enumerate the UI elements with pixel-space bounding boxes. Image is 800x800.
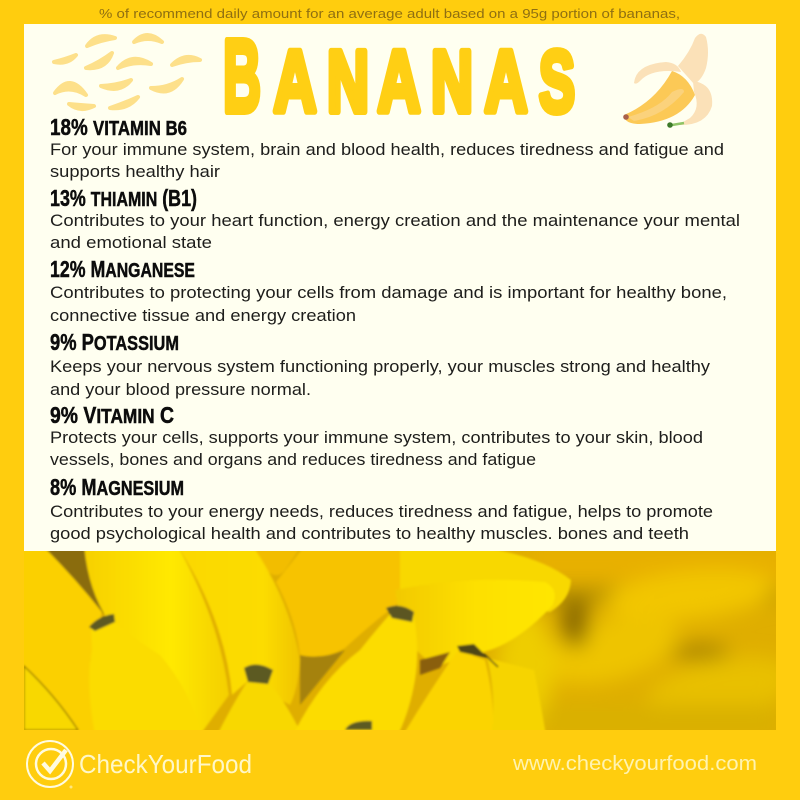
item: vitamin C [50,402,703,469]
item: thiamin [50,185,740,252]
title: N [431,34,473,130]
logo wordmark: CheckYourFood [79,749,252,779]
photo: left bananas [20,545,102,735]
title: A [378,34,420,130]
panel: nutrients [24,18,776,551]
item: vitamin C: vessels, bones and organs and reduces tiredness and fatigue [50,450,536,469]
photo: sharp foreground bananas [20,545,571,735]
item: potassium: 9% POTASSIUM [50,329,179,355]
item: manganese: 12% MANGANESE [50,256,195,282]
website url: www.checkyourfood.com [512,753,757,775]
icon: peeled banana [623,34,712,128]
icon: scattered banana shapes [54,35,200,109]
photo: back banana upper middle [256,551,298,575]
photo: front banana left [89,623,182,730]
subtitle: portion note: % of recommend daily amount for an average adult based on a 95g portion of bananas, [99,6,680,21]
photo: banana with stem, centre [218,680,298,730]
item: potassium: Keeps your nervous system functioning properly, your muscles strong and healthy [50,357,711,376]
title: S [539,34,575,130]
photo background: blurred bananas [492,555,776,722]
title: A [274,34,316,130]
item: vitamin B6: supports healthy hair [50,162,220,181]
item: vitamin B6 [50,114,724,181]
item: vitamin B6: 18% VITAMIN B6 [50,114,187,140]
item: magnesium: 8% MAGNESIUM [50,474,184,500]
item: vitamin C: 9% VITAMIN C [50,402,174,428]
item: thiamin: Contributes to your heart function, energy creation and the maintenance your mental [50,211,740,230]
icon: check mark badge [27,741,73,788]
item: vitamin B6: For your immune system, brain and blood health, reduces tiredness and fatigue and [50,140,724,159]
item: magnesium: Contributes to your energy needs, reduces tiredness and fatigue, helps to promote [50,502,713,521]
item: potassium: and your blood pressure normal. [50,380,311,399]
item: thiamin: and emotional state [50,233,212,252]
title: N [327,34,369,130]
item: manganese: connective tissue and energy creation [50,306,356,325]
item: vitamin C: Protects your cells, supports your immune system, contributes to your skin, blood [50,428,703,447]
title: A [484,34,528,130]
item: magnesium: good psychological health and contributes to healthy muscles. bones and teeth [50,524,689,543]
title: B [223,18,261,134]
item: manganese [50,256,727,325]
photo: right side bananas [400,545,571,612]
photo: bananas [20,545,800,735]
logo: CheckYourFood [27,741,252,788]
item: potassium [50,329,711,399]
title [223,18,575,134]
item: thiamin: 13% THIAMIN (B1) [50,185,197,211]
photo: dark gap top left [46,551,104,615]
item: magnesium [50,474,713,543]
item: manganese: Contributes to protecting your cells from damage and is important for healthy bone, [50,283,727,302]
